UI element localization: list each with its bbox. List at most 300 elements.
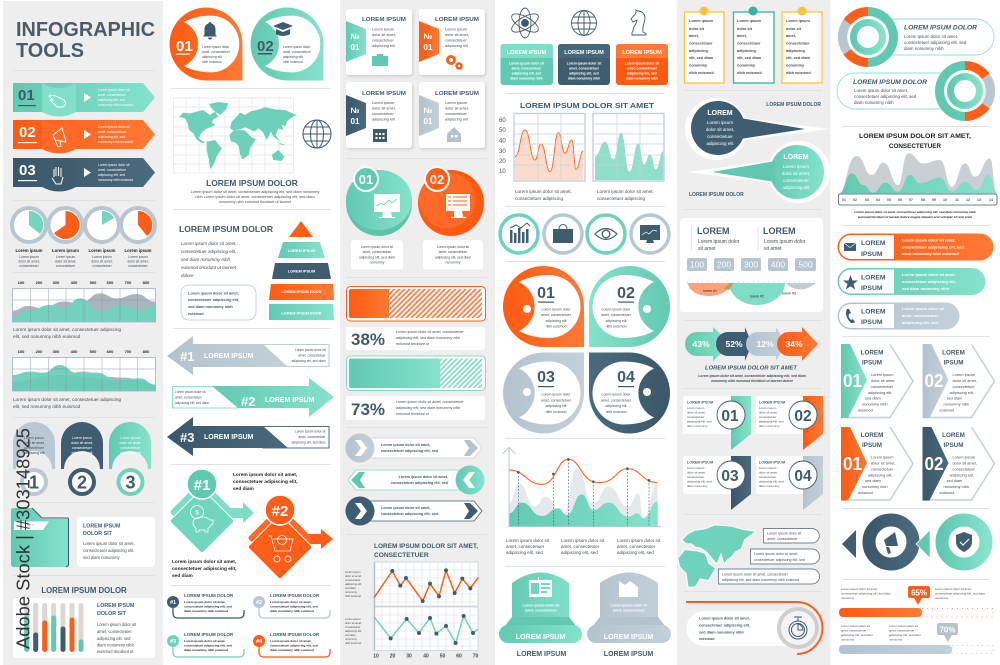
ribbon 02: amet, consectetuer	[98, 130, 127, 134]
progress 70%	[839, 623, 993, 654]
y axis: 50	[499, 128, 506, 134]
card orange: adipiscing elit	[445, 44, 469, 48]
text top: sed diam	[233, 486, 254, 492]
arch 1	[13, 422, 55, 494]
bubble teal: consectetuer	[783, 178, 809, 183]
stat 73%: euismod tincidunt ut	[396, 412, 430, 416]
row 3	[346, 496, 482, 526]
arch 2: adipiscing elit	[71, 451, 93, 455]
number chips: 300	[744, 260, 758, 270]
panel: donut 2: Lorem ipsum dolor sit amet,	[854, 88, 908, 93]
side text: Lorem ipsum	[345, 570, 361, 574]
pill teal: Lorem ipsum dolor sit amet,	[902, 272, 956, 277]
segment 02	[589, 266, 670, 347]
heading: LOREM IPSUM DOLOR	[179, 224, 274, 234]
card orange: Lorem ipsum dolor sit	[625, 62, 660, 66]
heading: LOREM IPSUM DOLOR SIT AMET,	[374, 543, 478, 550]
bubble teal: dolor sit amet,	[782, 171, 810, 176]
panel: folder with text	[11, 508, 155, 567]
bubble teal: LOREM	[783, 154, 809, 161]
chart: area chart top: 700	[125, 280, 132, 285]
arrow 43%: 43%	[692, 339, 710, 349]
axis labels: 30	[406, 654, 412, 660]
ribbon 03: adipiscing elit, sed	[98, 173, 125, 177]
circle 02: 02	[430, 172, 444, 187]
text 01: nonummy	[370, 260, 385, 264]
icon: folder: text	[27, 526, 31, 530]
note #1: Lorem ipsum dolor sit amet,	[184, 600, 226, 604]
tab 02: adipiscing elit, sed	[759, 420, 784, 424]
card teal	[346, 9, 412, 75]
captions: Lorem ipsum dolor sit amet,	[515, 189, 572, 194]
callout 2: consectetuer adipiscing elit, sed	[754, 558, 805, 562]
bubble teal: Lorem ipsum	[783, 164, 809, 169]
side text: dolor sit amet,	[345, 574, 362, 578]
card gray 02: Lorem ipsum	[952, 372, 975, 377]
card teal: №	[351, 32, 360, 41]
note #4: consectetuer adipiscing elit, sed	[270, 644, 318, 648]
note #3: #3	[170, 639, 176, 645]
card orange: LOREM IPSUM	[622, 50, 662, 56]
card teal 01	[841, 344, 913, 418]
side text: nibh euismod	[345, 594, 361, 598]
text block: DOLOR SIT	[97, 611, 127, 617]
bubble dark: adipiscing elit	[706, 141, 734, 146]
progress 65%: Lorem ipsum dolor sit amet,	[935, 587, 972, 591]
axis labels	[373, 654, 478, 660]
panel: drop circle 02: Lorem ipsum dolor	[283, 45, 311, 49]
pie 4: Lorem ipsum	[125, 248, 152, 253]
tab 02: consectetuer	[759, 415, 776, 419]
axis: 12	[966, 198, 970, 202]
side text	[345, 570, 362, 645]
stat 38%: Lorem ipsum dolor sit amet, consectetuer	[396, 330, 464, 334]
progress 65%: 65%	[911, 588, 927, 598]
pill gray: Lorem ipsum dolor sit	[902, 306, 945, 311]
number chips: 100	[690, 260, 704, 270]
text card: DOLOR SIT	[83, 531, 113, 537]
axis: 01	[842, 198, 846, 202]
panel: donut 2: LOREM IPSUM DOLOR	[853, 79, 928, 86]
card orange: consectetuer	[445, 38, 467, 42]
card teal: consectetuer	[372, 38, 394, 42]
chart: area chart top: 100	[18, 280, 25, 285]
card dark: adipiscing elit	[372, 118, 396, 122]
y axis: 30	[499, 149, 506, 155]
stat 73%	[346, 396, 485, 420]
italic text	[181, 241, 237, 278]
row 1	[346, 434, 482, 462]
pill orange: LOREM	[861, 240, 886, 247]
note #1: diam nonummy nibh euismod	[184, 609, 228, 613]
axis: 08	[921, 198, 925, 202]
text block: LOREM IPSUM	[97, 603, 135, 609]
panel: icon pills	[838, 234, 994, 330]
y axis	[499, 118, 506, 175]
axis: 10	[943, 198, 947, 202]
ribbon 01: 01	[18, 87, 35, 104]
card orange 01: dolor sit amet,	[871, 460, 895, 466]
chart: area chart top: 500	[90, 280, 97, 285]
tab 01: diam nonummy	[687, 424, 708, 428]
card gray 02: adipiscing elit,	[950, 390, 974, 395]
pill gray: amet, consectetuer	[902, 313, 939, 318]
icon: globe	[303, 120, 331, 148]
note #3: Lorem ipsum dolor sit amet,	[184, 639, 226, 643]
card gray 02: sed diam	[946, 396, 962, 400]
caption	[698, 366, 806, 383]
arrow #2: amet, consectetuer	[175, 396, 203, 400]
card orange 01: LOREM	[861, 432, 883, 439]
arrow #2: #2	[241, 394, 255, 409]
panel: diamonds	[169, 469, 333, 580]
callout 3: adipiscing elit, sed diam nonummy nibh euismod	[722, 578, 799, 582]
card gray 02: consectetuer	[952, 384, 975, 389]
bubble dark: LOREM	[707, 110, 733, 117]
paragraph	[854, 210, 976, 219]
text 01: adipiscing elit, sed diam	[359, 256, 395, 260]
card gray 02: 02	[924, 371, 944, 391]
tab 03: consectetuer	[687, 475, 704, 479]
pill teal: sed diam nonummy nibh	[902, 286, 950, 291]
text 02	[423, 240, 483, 270]
progress 65%: Lorem ipsum dolor sit amet,	[841, 587, 878, 591]
row 2: consectetuer adipiscing elit, sed	[391, 481, 449, 485]
panel: ring icons	[500, 215, 669, 253]
ribbon 02: 02	[19, 124, 36, 141]
title: TOOLS	[16, 39, 84, 62]
panel: percent progress	[839, 586, 993, 654]
chart left	[514, 114, 585, 181]
progress 70%: adipiscing elit, sed diam	[841, 633, 873, 637]
callout box: euismod	[188, 312, 204, 316]
callout box: sed diam nonummy nibh	[188, 305, 233, 309]
panel: percent arrows	[685, 327, 818, 383]
stat 38%	[346, 327, 485, 350]
pie 4	[121, 208, 155, 268]
tab 01: LOREM IPSUM	[687, 400, 714, 404]
ring eye	[587, 215, 625, 253]
ribbon 03: nonummy nibh euismod	[98, 178, 133, 182]
icon: house	[447, 127, 461, 142]
card orange 01: sed diam	[865, 478, 881, 483]
card orange	[419, 9, 485, 75]
tab 01: 01	[721, 408, 739, 425]
axis: 07	[909, 198, 913, 202]
pill orange: Lorem ipsum dolor sit amet,	[902, 238, 956, 242]
arch 3	[109, 422, 151, 494]
segment 02: 02	[617, 285, 635, 302]
card dark 02: Lorem ipsum	[952, 454, 975, 460]
arch 1: adipiscing elit	[23, 451, 45, 455]
chart: area and line: Lorem ipsum dolor sit	[506, 538, 550, 543]
progress 65%	[839, 586, 993, 617]
pie 3: Lorem ipsum	[92, 255, 112, 259]
italic text: dolore	[181, 273, 194, 278]
card dark: adipiscing elit, sed	[569, 72, 599, 76]
row 3: consectetuer adipiscing elit, sed	[381, 512, 439, 516]
arch 3: adipiscing elit	[120, 451, 141, 455]
world map	[179, 102, 297, 169]
pill gray	[838, 302, 960, 330]
note yellow 2	[782, 6, 822, 83]
chart: area chart top	[12, 280, 156, 339]
panel: drop circle 01: nibh euismod	[202, 60, 222, 64]
card dark 02: euismod	[940, 490, 954, 495]
dividers	[13, 70, 990, 592]
progress 70%: adipiscing elit, sed diam	[889, 633, 921, 637]
card gray: LOREM IPSUM	[435, 91, 479, 97]
card dark: dolor sit amet,	[372, 106, 396, 110]
icon: gears	[448, 56, 462, 68]
chart: area and line: amet, consectetuer	[617, 544, 656, 549]
chart: area and line: adipiscing elit, sed	[617, 550, 654, 555]
panel: scale card	[680, 218, 823, 312]
card teal 01: Lorem ipsum	[871, 372, 894, 377]
callout 1	[764, 528, 819, 543]
tab 03: adipiscing elit, sed	[687, 480, 712, 484]
arch 3: 3	[125, 472, 136, 492]
paragraph	[191, 190, 319, 204]
pie 1: Lorem ipsum	[19, 255, 39, 259]
icon: id badge	[529, 577, 552, 597]
dome gray: amet, consectetuer	[613, 608, 646, 612]
segment 04: adipiscing elit	[605, 404, 627, 408]
pyramid chart	[269, 221, 334, 320]
tab 01: dolor sit amet,	[687, 410, 706, 414]
icon: bars	[619, 581, 638, 597]
arch 1: dolor sit amet,	[23, 441, 45, 445]
card dark: amet, consectetuer	[569, 66, 600, 70]
axis	[838, 194, 997, 205]
card teal: 01	[351, 43, 360, 52]
heading: LOREM IPSUM DOLOR SIT AMET,	[859, 133, 971, 140]
text 02: Lorem ipsum dolor sit	[437, 245, 469, 249]
segment 02: Lorem ipsum dolor	[602, 308, 631, 312]
note #2: #2	[256, 600, 262, 606]
arrow 12%: 12%	[756, 339, 774, 349]
arrow #3: adipiscing elit, sed diam	[292, 440, 326, 444]
chart: area chart top: elit, sed nonummy nibh euismod	[13, 334, 81, 339]
panel: stopwatch: Lorem ipsum dolor sit amet,	[699, 616, 750, 620]
note #2	[253, 593, 330, 618]
ribbon 01	[13, 83, 155, 116]
text 02: nonummy	[446, 260, 461, 264]
chart: area chart bottom: 800	[143, 349, 150, 354]
progress 70%: amet, consectetuer	[841, 628, 867, 632]
axis labels: 50	[440, 654, 445, 660]
card gray 02: dolor sit amet,	[952, 378, 977, 383]
text 01: amet, consectetuer	[363, 250, 392, 254]
side text: dolor sit amet,	[345, 621, 362, 625]
pill gray: LOREM	[861, 308, 886, 316]
progress 70%: nonummy	[889, 638, 903, 642]
card dark: 01	[351, 117, 360, 126]
dome teal: LOREM IPSUM	[517, 651, 566, 658]
text top	[233, 472, 298, 492]
card orange 01	[841, 427, 913, 500]
progress 65%: nonummy	[841, 596, 855, 600]
text card: Lorem ipsum dolor sit amet,	[83, 541, 135, 546]
panel: drop circle 01: amet, consectetuer	[202, 50, 231, 54]
chart: area chart bottom: 100	[18, 349, 25, 354]
tab 04: 04	[794, 468, 812, 485]
caption: Lorem ipsum dolor sit amet, consectetuer adipiscing elit, sed diam	[698, 374, 806, 378]
arch 1: Lorem ipsum	[24, 436, 44, 440]
callout box: Lorem ipsum dolor sit amet,	[188, 292, 239, 296]
stat 38%: euismod tincidunt ut	[396, 342, 430, 346]
captions: consectetuer adipiscing	[515, 196, 563, 201]
pie 2	[48, 208, 82, 268]
card dark 02: consectetuer	[952, 466, 975, 472]
panel: drop circle 02: adipiscing elit	[283, 55, 303, 59]
arrow #1: amet, consectetuer	[298, 354, 326, 358]
ribbon 01: Lorem ipsum dolor sit	[98, 88, 130, 92]
panel: donut 1	[838, 7, 994, 67]
bubble teal: adipiscing elit	[782, 185, 810, 190]
progress 65%: consectetuer adipiscing elit, sed diam	[935, 592, 985, 596]
text block: adipiscing elit, sed	[97, 636, 131, 641]
captions: Lorem ipsum dolor sit amet,	[597, 189, 654, 194]
ribbon 02	[13, 120, 155, 154]
side text: sed diam	[345, 586, 357, 590]
tab 03: LOREM IPSUM	[687, 460, 714, 464]
arrow #2	[172, 378, 334, 417]
card teal 01: sed diam	[865, 396, 881, 400]
progress 65%: nonummy	[935, 596, 949, 600]
card dark	[346, 82, 412, 148]
progress 70%: Lorem ipsum dolor sit	[841, 624, 870, 628]
pie 3: consectetuer	[92, 264, 113, 268]
note yellow 1: adipiscing	[689, 49, 708, 53]
axis: 13	[977, 198, 981, 202]
pyramid chart: LOREM IPSUM DOOR	[281, 289, 322, 294]
chart: area chart bottom: 500	[90, 349, 97, 354]
tab 04: diam nonummy	[759, 484, 780, 488]
y axis: 60	[499, 118, 506, 124]
heading	[859, 133, 971, 150]
number chips: 200	[717, 260, 731, 270]
ring dark	[842, 520, 913, 564]
side text: consectetuer	[345, 625, 360, 629]
note #3	[167, 632, 244, 657]
tab 02: diam nonummy	[759, 424, 780, 428]
arch 2: consectetuer	[72, 446, 93, 450]
arrow #3: LOREM IPSUM	[204, 434, 254, 441]
note #4: #4	[256, 639, 263, 645]
italic text: sed diam nonummy nibh	[181, 257, 231, 262]
icon: graduation cap	[273, 22, 293, 36]
bubble dark: Lorem ipsum	[707, 120, 733, 125]
segment 01	[503, 266, 584, 347]
panel: drop circle 02: 02	[257, 38, 274, 55]
paragraph: nibh Lorem ipsum dolor sit amet, consectetuer adipiscing elit, sed diam	[195, 195, 315, 199]
card teal: diam nonummy nibh	[510, 76, 543, 80]
headings: Lorem ipsum dolor	[698, 239, 740, 245]
side text: nonummy	[345, 591, 357, 594]
chart: area and line: amet, consectetuer	[506, 544, 545, 549]
card orange 01: 01	[843, 454, 862, 474]
arch 1: consectetuer	[24, 446, 45, 450]
progress 70%: nonummy	[841, 638, 855, 642]
caption: nonummy nibh euismod tincidunt ut laoreet dolore	[711, 379, 793, 383]
card	[680, 218, 823, 312]
card orange: dolor sit amet,	[445, 33, 469, 37]
icon: phone	[846, 309, 855, 323]
icon: star	[843, 275, 858, 290]
stat 38%: adipiscing elit, sed diam nonummy nibh	[396, 336, 460, 340]
chart: area chart bottom: 400	[71, 349, 78, 354]
panel: donut 2: consectetuer adipiscing elit, sed	[854, 94, 917, 99]
panel: world map	[173, 98, 331, 204]
ribbon 03: 03	[19, 162, 36, 179]
note yellow 1	[684, 6, 724, 83]
icon: checklist	[446, 194, 470, 218]
arrow 34%: 34%	[785, 339, 803, 349]
axis labels: 70	[473, 654, 478, 660]
note green: nibh euismod	[737, 71, 762, 75]
pill orange: consectetuer adipiscing elit, sed	[902, 244, 964, 250]
axis: 06	[898, 198, 902, 202]
chart grid	[374, 562, 478, 650]
segment 01: adipiscing elit	[545, 319, 567, 323]
note yellow 1: nonummy	[689, 64, 708, 68]
card orange 01: nonummy nibh	[862, 484, 888, 489]
dome teal: Lorem ipsum dolor sit	[523, 604, 560, 608]
chart: area chart top: Lorem ipsum dolor sit amet, consectetuer adipiscing	[13, 327, 122, 332]
dome gray: LOREM IPSUM	[604, 651, 653, 658]
row 2	[348, 466, 484, 494]
note #3: consectetuer adipiscing elit, sed	[184, 644, 232, 648]
axis: 05	[887, 198, 891, 202]
card teal 01: LOREM	[861, 350, 883, 356]
note #2: Lorem ipsum dolor sit amet,	[270, 600, 312, 604]
card orange: adipiscing elit, sed	[627, 72, 657, 76]
ribbon 01: adipiscing elit, sed	[98, 98, 125, 102]
captions: consectetuer adipiscing	[597, 196, 645, 201]
segment 04: amet, consectetuer	[601, 398, 632, 402]
segment 02: nibh euismod	[606, 324, 626, 328]
card dark 02: sed diam	[946, 478, 962, 483]
icon: calendar	[373, 129, 387, 142]
note yellow 1: consectetuer	[689, 42, 713, 46]
note yellow 2: consectetuer	[786, 42, 810, 46]
segment 01: amet, consectetuer	[541, 313, 572, 317]
card gray 02: LOREM	[942, 350, 965, 356]
tab 02: dolor sit amet,	[759, 410, 778, 414]
card gray: №	[424, 106, 433, 115]
heading: LOREM IPSUM DOLOR	[206, 178, 298, 188]
side text: adipiscing elit,	[345, 629, 362, 633]
number chips: 400	[771, 260, 785, 270]
note yellow 2: adipiscing	[786, 49, 805, 53]
axis: 11	[955, 198, 959, 202]
arrow #3: amet, consectetuer	[298, 435, 326, 439]
note green: consectetuer	[737, 42, 761, 46]
arrow #2: Lorem ipsum dolor sit	[175, 390, 206, 394]
card orange: LOREM IPSUM	[435, 17, 479, 23]
icon: chess knight	[631, 10, 646, 35]
text top: Lorem ipsum dolor sit amet,	[233, 472, 298, 478]
side text: consectetuer	[345, 578, 360, 582]
stat 38%: 38%	[351, 330, 385, 349]
pie 1	[12, 208, 46, 268]
icon: shopping cart	[268, 536, 293, 562]
diamond #2	[247, 495, 333, 580]
row 3: Lorem ipsum dolor sit amet,	[381, 506, 430, 510]
note #1: consectetuer adipiscing elit, sed	[184, 604, 232, 608]
icon: megaphone	[884, 532, 898, 554]
